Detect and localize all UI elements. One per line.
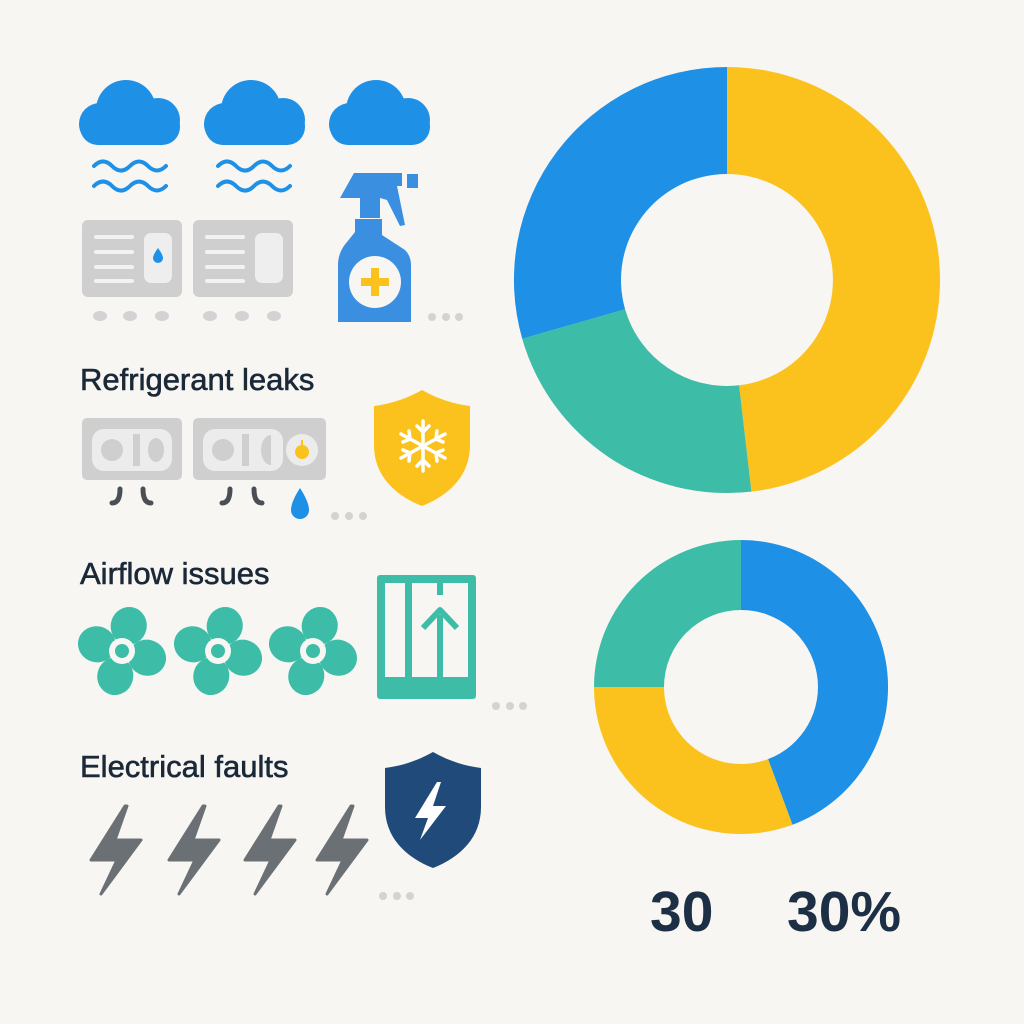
stat: 30: 30 bbox=[650, 880, 713, 944]
icon: AC units leaking bbox=[82, 418, 367, 520]
heading: electrical faults: Electrical faults bbox=[80, 749, 288, 784]
icon: yellow shield snowflake bbox=[374, 390, 470, 506]
icon: navy shield bolt bbox=[379, 752, 481, 900]
chart: small donut bbox=[594, 540, 888, 834]
heading: refrigerant leaks: Refrigerant leaks bbox=[80, 362, 314, 397]
icon: clouds with water bbox=[79, 80, 430, 190]
icon: AC panels bbox=[82, 220, 293, 321]
icon: fans bbox=[67, 596, 368, 706]
stat: 30%: 30% bbox=[787, 880, 901, 944]
icon: spray bottle bbox=[338, 173, 463, 322]
icon: lightning bolts bbox=[91, 806, 367, 894]
chart: large donut bbox=[514, 67, 940, 493]
heading: airflow issues: Airflow issues bbox=[80, 556, 270, 591]
icon: air filter with arrow bbox=[377, 575, 527, 710]
